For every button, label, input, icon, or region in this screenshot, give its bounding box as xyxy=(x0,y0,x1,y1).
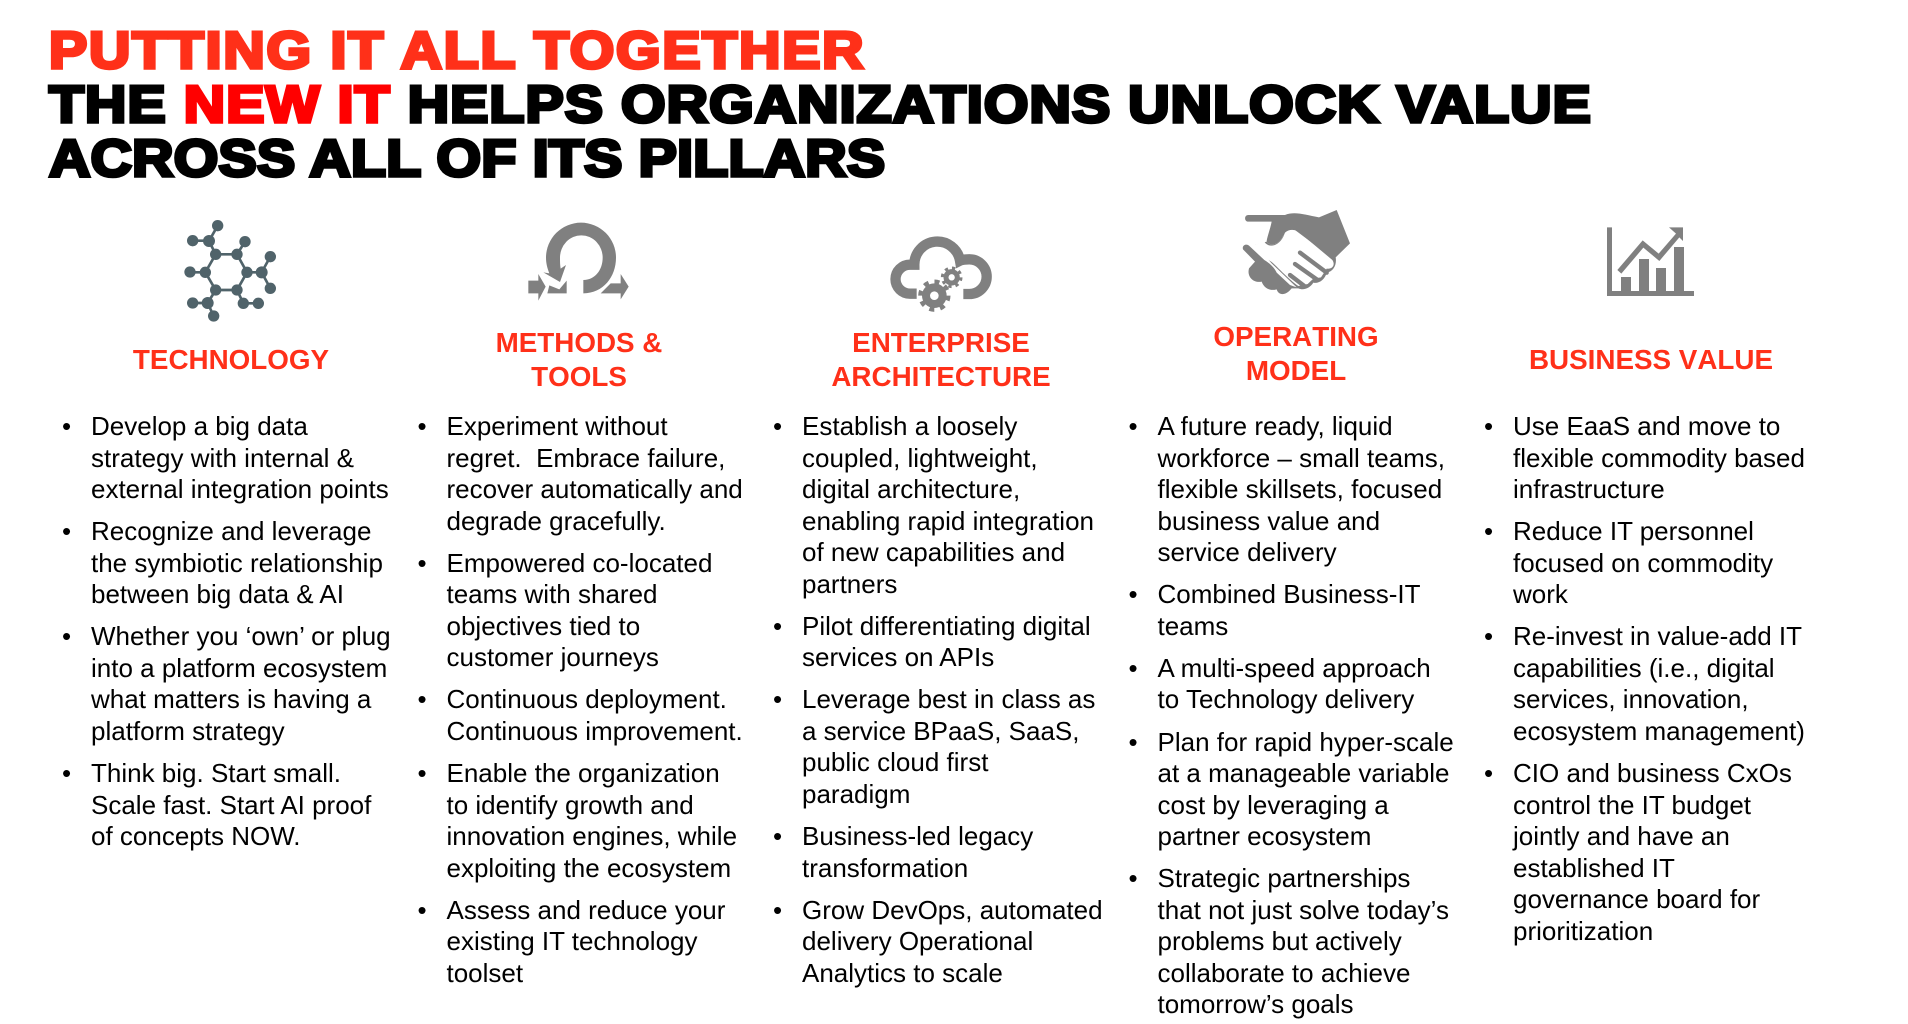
heading: technology: TECHNOLOGY xyxy=(133,344,329,375)
icon: iterative loop xyxy=(528,222,629,300)
text: methods and tools bullets: customer journeys xyxy=(446,642,659,672)
title: PUTTING IT ALL TOGETHER xyxy=(49,22,865,80)
icon: bar chart with arrow xyxy=(1607,227,1694,296)
text: enterprise architecture bullets: transformation xyxy=(802,853,968,883)
title xyxy=(48,22,1592,188)
text: methods and tools bullets: Experiment without xyxy=(446,411,668,441)
text: enterprise architecture bullets: services on APIs xyxy=(802,642,994,672)
text: operating model bullets: collaborate to achieve xyxy=(1158,958,1410,988)
text: operating model bullets: A multi-speed approach xyxy=(1158,653,1431,683)
heading: business value: BUSINESS VALUE xyxy=(1529,344,1773,375)
text: enterprise architecture bullets: a service BPaaS, SaaS, xyxy=(802,716,1079,746)
heading: methods and tools xyxy=(496,327,662,392)
text: enterprise architecture bullets: Establish a loosely xyxy=(802,411,1017,441)
text: business value bullets: capabilities (i.e., digital xyxy=(1513,653,1775,683)
text: methods and tools bullets: Continuous improvement. xyxy=(446,716,743,746)
text: operating model bullets: cost by leveraging a xyxy=(1158,790,1389,820)
text: operating model bullets: workforce – small teams, xyxy=(1158,442,1445,472)
text: enterprise architecture bullets: partners xyxy=(802,568,897,598)
text: technology bullets: between big data & AI xyxy=(91,579,344,609)
text: business value bullets: focused on commodity xyxy=(1513,548,1773,578)
text: enterprise architecture bullets: paradigm xyxy=(802,779,910,809)
text: enterprise architecture bullets: public cloud first xyxy=(802,747,988,777)
text: methods and tools bullets: toolset xyxy=(446,958,523,988)
text: business value bullets: flexible commodity based xyxy=(1513,442,1805,472)
text: methods and tools bullets: Enable the organization xyxy=(446,758,720,788)
text: business value bullets: established IT xyxy=(1513,853,1675,883)
text: technology bullets: of concepts NOW. xyxy=(91,821,301,851)
text: methods and tools bullets: Empowered co-located xyxy=(446,548,712,578)
title: THE NEW IT HELPS ORGANIZATIONS UNLOCK VALUE xyxy=(49,76,1592,134)
title: ACROSS ALL OF ITS PILLARS xyxy=(49,130,885,188)
heading: operating model: OPERATING xyxy=(1213,321,1379,352)
text: enterprise architecture bullets: Leverage best in class as xyxy=(802,684,1095,714)
text: operating model bullets xyxy=(1130,411,1454,1019)
text: operating model bullets: business value and xyxy=(1158,506,1380,536)
text: operating model bullets: tomorrow’s goals xyxy=(1158,989,1354,1019)
text: methods and tools bullets: recover automatically and xyxy=(446,474,743,504)
text: technology bullets: into a platform ecosystem xyxy=(91,653,387,683)
text: operating model bullets: that not just solve today’s xyxy=(1158,895,1449,925)
text: business value bullets: prioritization xyxy=(1513,916,1653,946)
icon: cloud with gears xyxy=(890,236,992,312)
text: technology bullets: the symbiotic relationship xyxy=(91,548,383,578)
text: business value bullets: work xyxy=(1513,579,1568,609)
text: business value bullets: services, innovation, xyxy=(1513,684,1749,714)
text: methods and tools bullets: Continuous deployment. xyxy=(446,684,727,714)
icon: handshake xyxy=(1242,210,1350,294)
text: enterprise architecture bullets: coupled, lightweight, xyxy=(802,442,1038,472)
text: methods and tools bullets: innovation engines, while xyxy=(446,821,737,851)
text: enterprise architecture bullets: enabling rapid integration xyxy=(802,506,1094,536)
text: methods and tools bullets: existing IT technology xyxy=(446,926,698,956)
text: enterprise architecture bullets xyxy=(774,411,1103,988)
heading: operating model: MODEL xyxy=(1246,355,1346,386)
text: technology bullets: Recognize and leverage xyxy=(91,516,371,546)
text: technology bullets: what matters is having a xyxy=(91,684,371,714)
text: operating model bullets: service delivery xyxy=(1158,537,1337,567)
text: business value bullets: Reduce IT personnel xyxy=(1513,516,1754,546)
text: operating model bullets: A future ready, liquid xyxy=(1158,411,1393,441)
text: enterprise architecture bullets: digital architecture, xyxy=(802,474,1020,504)
text: technology bullets: Scale fast. Start AI proof xyxy=(91,790,371,820)
text: operating model bullets: problems but actively xyxy=(1158,926,1402,956)
text: methods and tools bullets: objectives tied to xyxy=(446,611,640,641)
text: business value bullets: governance board for xyxy=(1513,884,1760,914)
text: technology bullets: strategy with internal & xyxy=(91,442,354,472)
text: methods and tools bullets: Assess and reduce your xyxy=(446,895,725,925)
heading: operating model xyxy=(1213,321,1379,386)
text: operating model bullets: flexible skillsets, focused xyxy=(1158,474,1442,504)
text: operating model bullets: teams xyxy=(1158,611,1228,641)
text: methods and tools bullets: to identify growth and xyxy=(446,790,694,820)
text: operating model bullets: to Technology delivery xyxy=(1158,684,1414,714)
text: methods and tools bullets: teams with shared xyxy=(446,579,657,609)
text: enterprise architecture bullets: Grow DevOps, automated xyxy=(802,895,1103,925)
icon: molecule xyxy=(184,220,276,322)
text: methods and tools bullets: exploiting the ecosystem xyxy=(446,853,731,883)
text: operating model bullets: Combined Business-IT xyxy=(1158,579,1420,609)
text: operating model bullets: Strategic partnerships xyxy=(1158,863,1410,893)
text: enterprise architecture bullets: Analytics to scale xyxy=(802,958,1003,988)
text: technology bullets: platform strategy xyxy=(91,716,285,746)
text: methods and tools bullets: regret. Embrace failure, xyxy=(446,442,725,472)
text: enterprise architecture bullets: Pilot differentiating digital xyxy=(802,611,1091,641)
text: business value bullets: control the IT budget xyxy=(1513,790,1751,820)
text: enterprise architecture bullets: of new capabilities and xyxy=(802,537,1065,567)
text: business value bullets: Re-invest in value-add IT xyxy=(1513,621,1802,651)
text: business value bullets: infrastructure xyxy=(1513,474,1665,504)
text: technology bullets xyxy=(63,411,391,851)
text: methods and tools bullets: degrade gracefully. xyxy=(446,506,666,536)
text: enterprise architecture bullets: Business-led legacy xyxy=(802,821,1033,851)
text: technology bullets: external integration points xyxy=(91,474,389,504)
text: operating model bullets: partner ecosystem xyxy=(1158,821,1371,851)
text: technology bullets: Develop a big data xyxy=(91,411,308,441)
heading: methods and tools: METHODS & xyxy=(496,327,662,358)
heading: enterprise architecture: ENTERPRISE xyxy=(852,327,1030,358)
text: business value bullets: ecosystem management) xyxy=(1513,716,1805,746)
text: methods and tools bullets xyxy=(418,411,743,988)
heading: methods and tools: TOOLS xyxy=(531,361,627,392)
text: business value bullets: CIO and business CxOs xyxy=(1513,758,1792,788)
text: business value bullets: jointly and have an xyxy=(1513,821,1730,851)
text: business value bullets xyxy=(1485,411,1805,946)
text: enterprise architecture bullets: delivery Operational xyxy=(802,926,1033,956)
heading: enterprise architecture: ARCHITECTURE xyxy=(831,361,1051,392)
text: business value bullets: Use EaaS and move to xyxy=(1513,411,1780,441)
heading: enterprise architecture xyxy=(831,327,1051,392)
text: technology bullets: Whether you ‘own’ or plug xyxy=(91,621,391,651)
text: operating model bullets: Plan for rapid hyper-scale xyxy=(1158,727,1454,757)
text: technology bullets: Think big. Start small. xyxy=(91,758,341,788)
text: operating model bullets: at a manageable variable xyxy=(1158,758,1449,788)
